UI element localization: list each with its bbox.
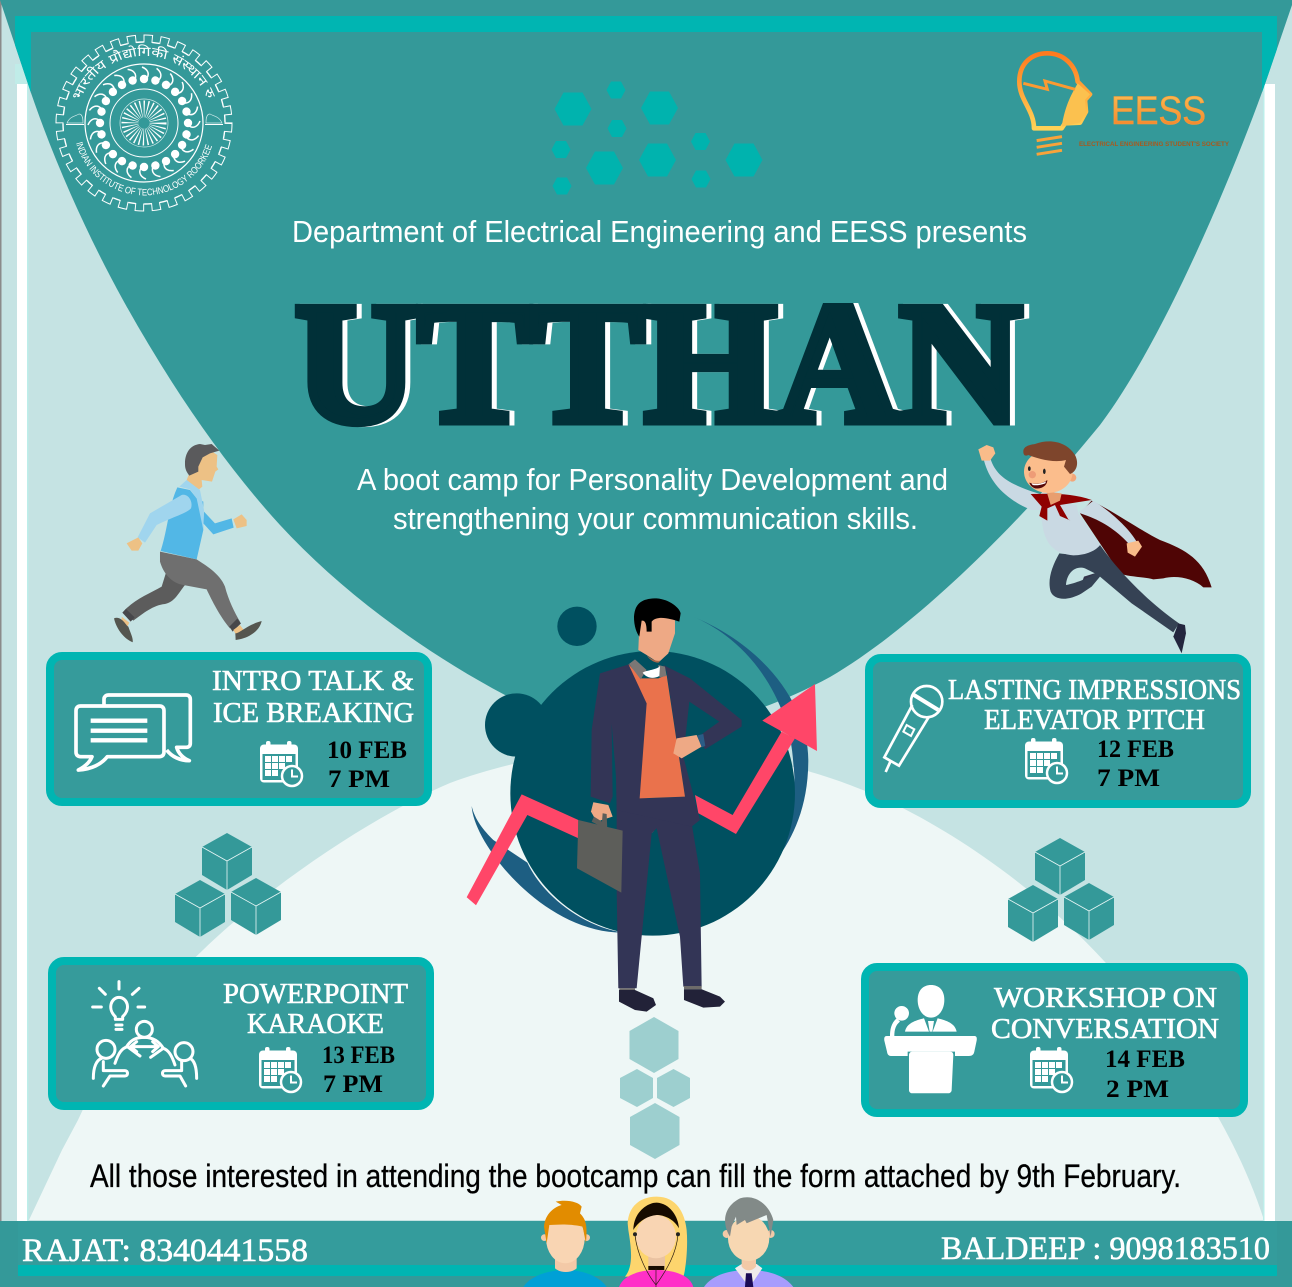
illustration: central businessman with growth arrow: [467, 598, 817, 1012]
decoration: bottom hexagons: [620, 1017, 690, 1159]
growth arrow: [467, 684, 817, 905]
contact: Rajat: RAJAT: 8340441558: [22, 1233, 308, 1269]
icon: calendar: [259, 1047, 301, 1092]
date and time: [327, 737, 407, 793]
icon: cubes left: [175, 833, 281, 937]
footer band: [0, 1221, 1292, 1287]
title: UTTHAN: UTTHAN: [295, 269, 1022, 459]
icon: team idea: [93, 982, 197, 1086]
large dark circle: [485, 607, 795, 936]
date and time: [322, 1042, 395, 1098]
person: woman with earphones: [619, 1197, 693, 1287]
subtitle: [357, 462, 948, 536]
date and time: 7 PM: [323, 1071, 383, 1098]
heading: ICE BREAKING: [213, 698, 414, 729]
logo: EESS: [1019, 53, 1230, 154]
heading: KARAOKE: [247, 1009, 384, 1040]
person: orange hair: [523, 1201, 607, 1287]
crescent: right: [692, 616, 808, 860]
date and time: 7 PM: [1097, 765, 1160, 792]
card: lasting impressions: [869, 658, 1247, 804]
card: powerpoint karaoke: [52, 961, 430, 1106]
heading: POWERPOINT: [223, 979, 408, 1010]
icon: calendar: [260, 741, 302, 786]
date and time: 10 FEB: [327, 737, 407, 764]
icon: cubes right: [1008, 838, 1114, 942]
subtitle: A boot camp for Personality Development and: [357, 462, 948, 497]
left edge line: [0, 0, 2, 1287]
icon: bulb head: [1019, 53, 1090, 154]
crescent: left: [472, 806, 623, 933]
EESS tagline: ELECTRICAL ENGINEERING STUDENT'S SOCIETY: [1079, 141, 1230, 148]
heading: WORKSHOP ON: [994, 983, 1217, 1014]
light mound background: [29, 745, 1264, 1220]
icon: calendar: [1025, 738, 1067, 783]
card: intro talk: [50, 656, 428, 802]
illustration: three people: [523, 1197, 793, 1287]
date and time: [1097, 736, 1174, 792]
EESS wordmark: EESS: [1111, 89, 1206, 133]
left white border: [15, 64, 29, 1221]
icon: speaker at podium: [884, 985, 977, 1093]
presenter line: Department of Electrical Engineering and EESS presents: [292, 214, 1027, 249]
heading: ELEVATOR PITCH: [984, 705, 1205, 736]
subtitle: strengthening your communication skills.: [393, 501, 918, 536]
date and time: 7 PM: [328, 766, 390, 793]
right white border: [1263, 84, 1275, 1221]
teal dome: [0, 0, 1292, 732]
person: grey hair man: [704, 1197, 793, 1287]
illustration: running man: [114, 444, 262, 642]
title: UTTHAN: UTTHAN: [300, 269, 1027, 459]
card: workshop on conversation: [865, 967, 1244, 1113]
heading: CONVERSATION: [991, 1014, 1219, 1045]
logo: IIT Roorkee emblem: INDIAN INSTITUTE OF TECHNOLOGY ROORKEE: [76, 142, 212, 196]
heading: LASTING IMPRESSIONS: [948, 675, 1241, 706]
icon: calendar: [1030, 1047, 1072, 1092]
icon: microphone: [884, 686, 942, 772]
date and time: 14 FEB: [1105, 1046, 1185, 1073]
logo: IIT Roorkee emblem: [56, 34, 232, 212]
businessman: [577, 598, 742, 1012]
date and time: 13 FEB: [322, 1042, 395, 1069]
illustration: superhero man: [978, 441, 1212, 653]
date and time: [1105, 1046, 1185, 1103]
contact: Baldeep: BALDEEP : 9098183510: [941, 1231, 1270, 1267]
date and time: 2 PM: [1106, 1076, 1169, 1103]
heading: [212, 666, 414, 729]
icon: chat bubbles: [76, 695, 190, 770]
date and time: 12 FEB: [1097, 736, 1174, 763]
heading: [223, 979, 408, 1040]
heading: [991, 983, 1219, 1045]
heading: INTRO TALK &: [212, 666, 414, 697]
decoration: top hexagons: [552, 82, 762, 194]
heading: [948, 675, 1241, 736]
